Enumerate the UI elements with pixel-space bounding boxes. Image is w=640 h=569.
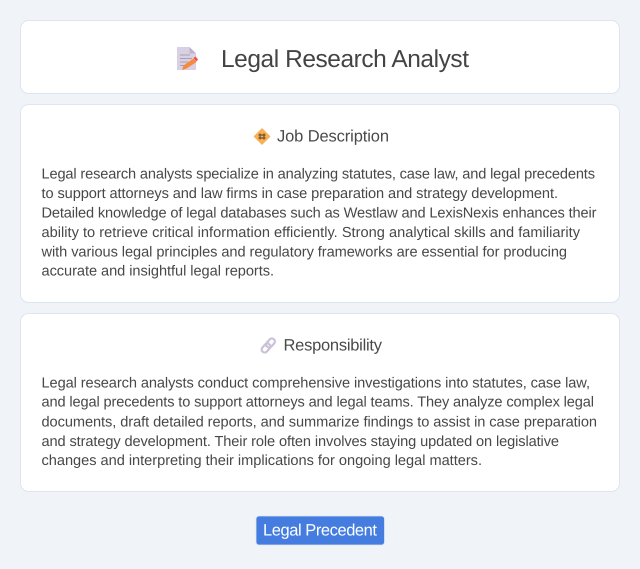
icon: chain link	[260, 337, 276, 354]
text block: responsibility: Legal research analysts conduct comprehensive investigations into statutes, case law,	[42, 376, 590, 392]
heading: job description: Job Description	[277, 128, 389, 146]
title: Legal Research Analyst	[221, 46, 469, 73]
panel: responsibility	[20, 314, 620, 492]
text block: job description: ability to retrieve critical information efficiently. Strong analytical skills and familiarity	[42, 225, 581, 241]
panel: title card	[20, 20, 620, 94]
text block: job description: accurate and insightful legal reports.	[42, 264, 274, 280]
tag button: legal precedent	[256, 516, 384, 545]
text block: responsibility: documents, draft detailed reports, and summarize findings to assist in case preparation	[42, 414, 597, 430]
text block: job description: with various legal principles and regulatory frameworks are essential for producing	[40, 244, 567, 260]
tag button: legal precedent: Legal Precedent	[263, 522, 377, 540]
text block: job description: Detailed knowledge of legal databases such as Westlaw and LexisNexis enhances their	[42, 206, 597, 222]
icon: document with pencil	[177, 47, 198, 70]
text block: responsibility: and legal precedents to support attorneys and legal teams. They analyze complex legal	[42, 394, 594, 410]
text block: responsibility: and strategy development. Their role often involves staying updated on legislative	[42, 434, 559, 450]
text block: job description: to support attorneys and law firms in case preparation and strategy development.	[42, 186, 558, 202]
icon: orange diamond sign	[254, 129, 270, 144]
text block: responsibility: changes and interpreting their implications for ongoing legal matters.	[42, 453, 482, 469]
panel: job description	[20, 104, 620, 302]
text block: responsibility	[42, 376, 597, 469]
text block: job description: Legal research analysts specialize in analyzing statutes, case law, and legal precedents	[42, 166, 595, 182]
text block: job description	[40, 166, 597, 280]
heading: responsibility: Responsibility	[284, 336, 383, 354]
